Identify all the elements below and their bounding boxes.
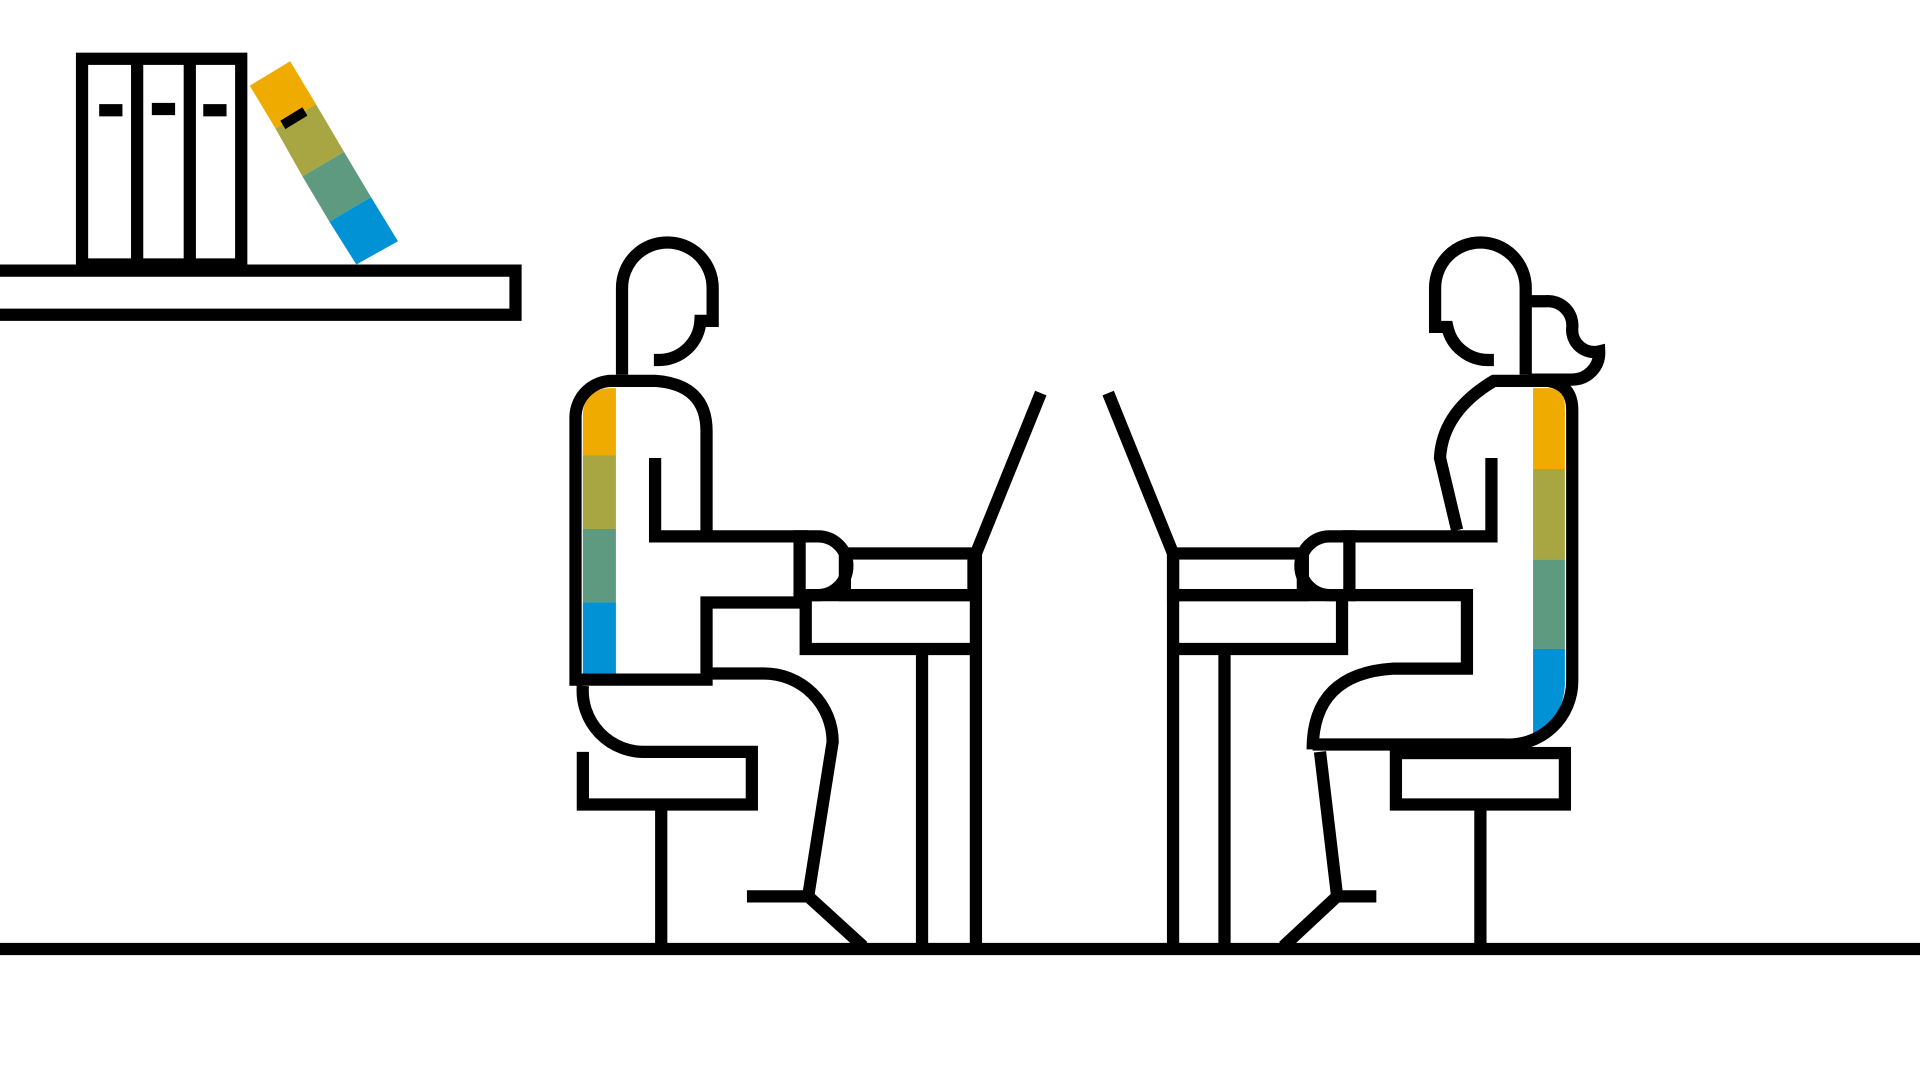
color strip left [583, 388, 616, 673]
tilted colored book [250, 61, 398, 264]
laptop screen right [1108, 393, 1173, 553]
person left [576, 242, 973, 947]
shelf [0, 271, 516, 315]
laptop screen left [976, 393, 1041, 553]
desk left [806, 393, 1041, 945]
person right [1283, 242, 1599, 947]
floor line [0, 944, 1920, 954]
desk right [1108, 393, 1342, 945]
binders [82, 59, 241, 264]
color strip right [1533, 388, 1565, 735]
